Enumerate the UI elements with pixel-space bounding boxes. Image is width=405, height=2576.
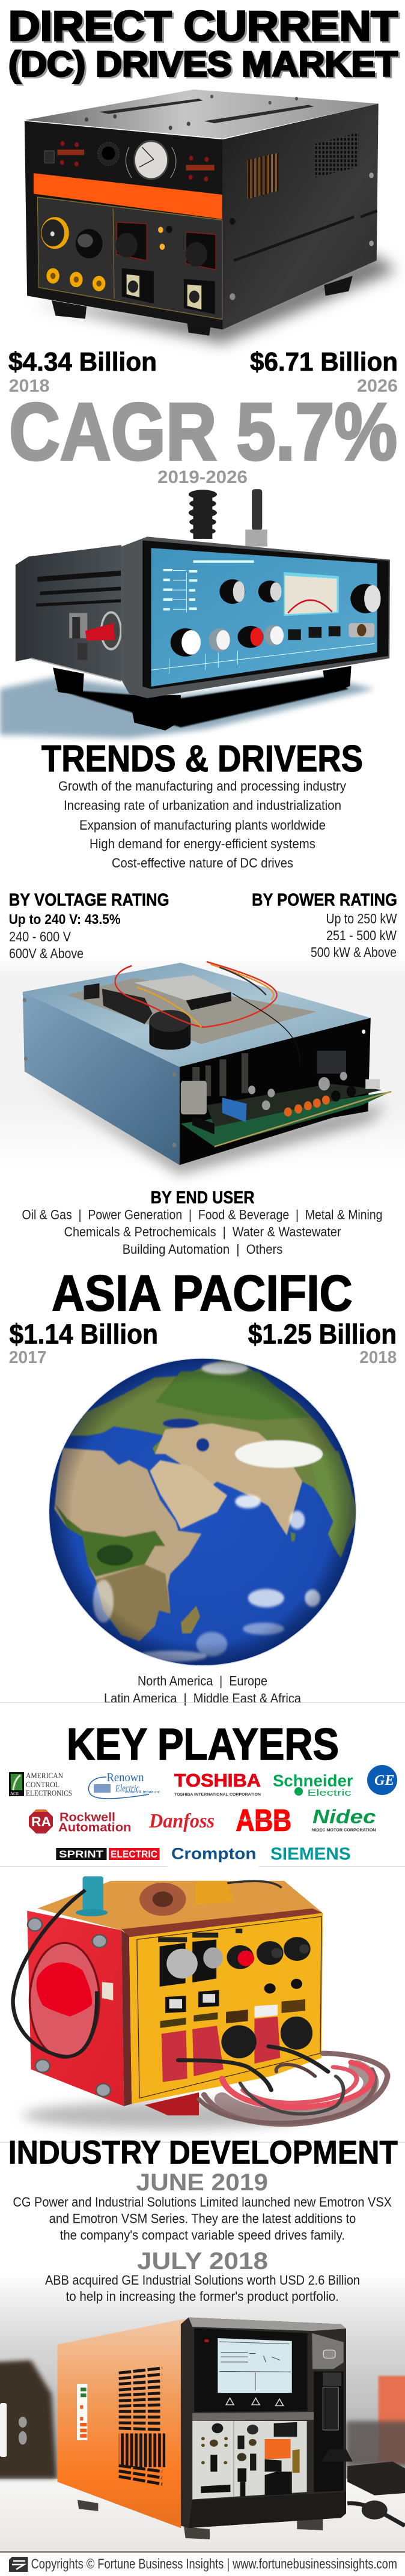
segment: by voltage rating: Up to 240 V: 43.5%: [9, 911, 121, 927]
development: July 2018: to help in increasing the former's product portfolio.: [66, 2289, 339, 2304]
market value 2018: 2018: [8, 376, 49, 396]
logo: ABB: ABB: [236, 1803, 291, 1838]
list: trends and drivers: [58, 779, 347, 870]
segment: by voltage rating: 600V & Above: [9, 946, 84, 961]
logo: Sprint Electric: [56, 1848, 160, 1860]
logos: key players: [9, 1765, 397, 1864]
segment: by end user: Building Automation | Others: [123, 1242, 282, 1257]
other regions list: [104, 1674, 301, 1706]
CAGR: 2019-2026: [157, 467, 248, 487]
logo: Renown Electric: Electric: [115, 1782, 139, 1794]
list: trends and drivers: High demand for energy-efficient systems: [90, 836, 315, 851]
market value 2026: 2026: [357, 376, 398, 396]
logo: Rockwell Automation: Automation: [58, 1821, 131, 1834]
Asia Pacific value 2017: $1.14 Billion: [10, 1319, 158, 1350]
title: (DC) DRIVES MARKET: [8, 44, 398, 84]
Asia Pacific value 2018: 2018: [359, 1348, 397, 1367]
logo: Rockwell Automation: [29, 1809, 131, 1834]
heading: Asia Pacific: ASIA PACIFIC: [52, 1265, 353, 1322]
logo: Schneider Electric: Schneider: [273, 1771, 353, 1790]
development: July 2018: [45, 2248, 360, 2304]
illustration: yellow and red drive with cables: [13, 1876, 388, 2129]
logo: Rockwell Automation: RA: [31, 1814, 51, 1829]
illustration: blue panel DC drive: [0, 489, 390, 738]
logo: Nidec: NIDEC MOTOR CORPORATION: [312, 1829, 376, 1833]
logo: Renown Electric: [88, 1771, 161, 1799]
list: trends and drivers: Cost-effective nature of DC drives: [112, 855, 293, 870]
logo: American Control Electronics: AMERICAN: [26, 1771, 64, 1780]
logo: Schneider Electric: [273, 1771, 353, 1798]
logo: Renown Electric: motors & repair inc.: [125, 1790, 161, 1794]
Asia Pacific value 2017: [9, 1319, 158, 1367]
illustration background: soft studio fade: [0, 955, 405, 1171]
segment: by voltage rating: 240 - 600 V: [9, 929, 72, 944]
logo: Renown Electric: Renown: [107, 1771, 144, 1784]
market value 2018: [8, 347, 157, 396]
other regions list: North America | Europe: [138, 1674, 267, 1689]
divider behind development heading: [0, 2142, 405, 2143]
list: trends and drivers: Expansion of manufacturing plants worldwide: [79, 818, 326, 833]
Asia Pacific value 2018: [248, 1319, 397, 1367]
logo: Toshiba: TOSHIBA INTERNATIONAL CORPORATION: [174, 1793, 261, 1797]
logo: GE: GE: [374, 1773, 394, 1788]
logo: American Control Electronics: ELECTRONICS: [26, 1788, 72, 1797]
logo: Danfoss: Danfoss: [148, 1810, 215, 1832]
segment: by voltage rating: [9, 890, 169, 961]
segment: by voltage rating: BY VOLTAGE RATING: [9, 890, 169, 910]
logo: American Control Electronics: CONTROL: [26, 1780, 59, 1789]
illustration: open drive with circuit board: [23, 962, 391, 1173]
market value 2026: $6.71 Billion: [250, 347, 398, 377]
logo: Rockwell Automation: Rockwell: [59, 1811, 115, 1824]
title: [8, 2, 400, 85]
segment: by end user: Chemicals & Petrochemicals | Water & Wastewater: [64, 1224, 341, 1239]
logo: Sprint Electric: SPRINT: [59, 1848, 104, 1860]
logo: American Control Electronics: [9, 1771, 72, 1797]
segment: by end user: [22, 1188, 382, 1257]
development: July 2018: JULY 2018: [137, 2248, 268, 2274]
Asia Pacific value 2017: 2017: [9, 1348, 47, 1367]
list: trends and drivers: Growth of the manufacturing and processing industry: [58, 779, 347, 794]
segment: by end user: BY END USER: [151, 1188, 255, 1208]
heading: key players: KEY PLAYERS: [67, 1719, 339, 1769]
title: (DC) DRIVES MARKET: [10, 46, 400, 85]
list: trends and drivers: Increasing rate of urbanization and industrialization: [64, 798, 341, 813]
logo: GE: [367, 1765, 397, 1795]
illustration: earth globe: [49, 1356, 359, 1666]
logo: Toshiba: TOSHIBA: [174, 1770, 261, 1791]
Asia Pacific value 2018: $1.25 Billion: [248, 1319, 397, 1350]
development: June 2019: and Emotron VSM Series. They are the latest additions to: [49, 2211, 356, 2226]
logo: Schneider Electric: Electric: [308, 1788, 352, 1798]
market value 2018: $4.34 Billion: [8, 347, 157, 377]
logo: Nidec: [312, 1806, 376, 1833]
logo: Nidec: Nidec: [312, 1806, 376, 1827]
logo: Siemens: SIEMENS: [270, 1845, 351, 1864]
segment: by power rating: [252, 890, 397, 960]
illustration: black DC drive with orange band: [25, 90, 398, 343]
icon: Fortune Business Insights logo: [9, 2557, 28, 2572]
development: July 2018: ABB acquired GE Industrial Solutions worth USD 2.6 Billion: [45, 2273, 360, 2288]
illustration: orange drive on a table: [0, 2272, 405, 2551]
footer: [0, 2551, 405, 2572]
logo: Crompton: Crompton: [171, 1844, 256, 1862]
title: DIRECT CURRENT: [10, 4, 400, 51]
development: June 2019: [13, 2169, 392, 2243]
heading: trends and drivers: TRENDS & DRIVERS: [41, 738, 363, 780]
development: June 2019: JUNE 2019: [136, 2169, 268, 2196]
title: DIRECT CURRENT: [8, 2, 398, 49]
market value 2026: [250, 347, 398, 396]
logo: Sprint Electric: ELECTRIC: [111, 1848, 157, 1860]
other regions list: Latin America | Middle East & Africa: [104, 1691, 301, 1706]
logo: American Control Electronics: ACE: [10, 1791, 19, 1796]
development: June 2019: the company's compact variable speed drives family.: [60, 2228, 345, 2243]
